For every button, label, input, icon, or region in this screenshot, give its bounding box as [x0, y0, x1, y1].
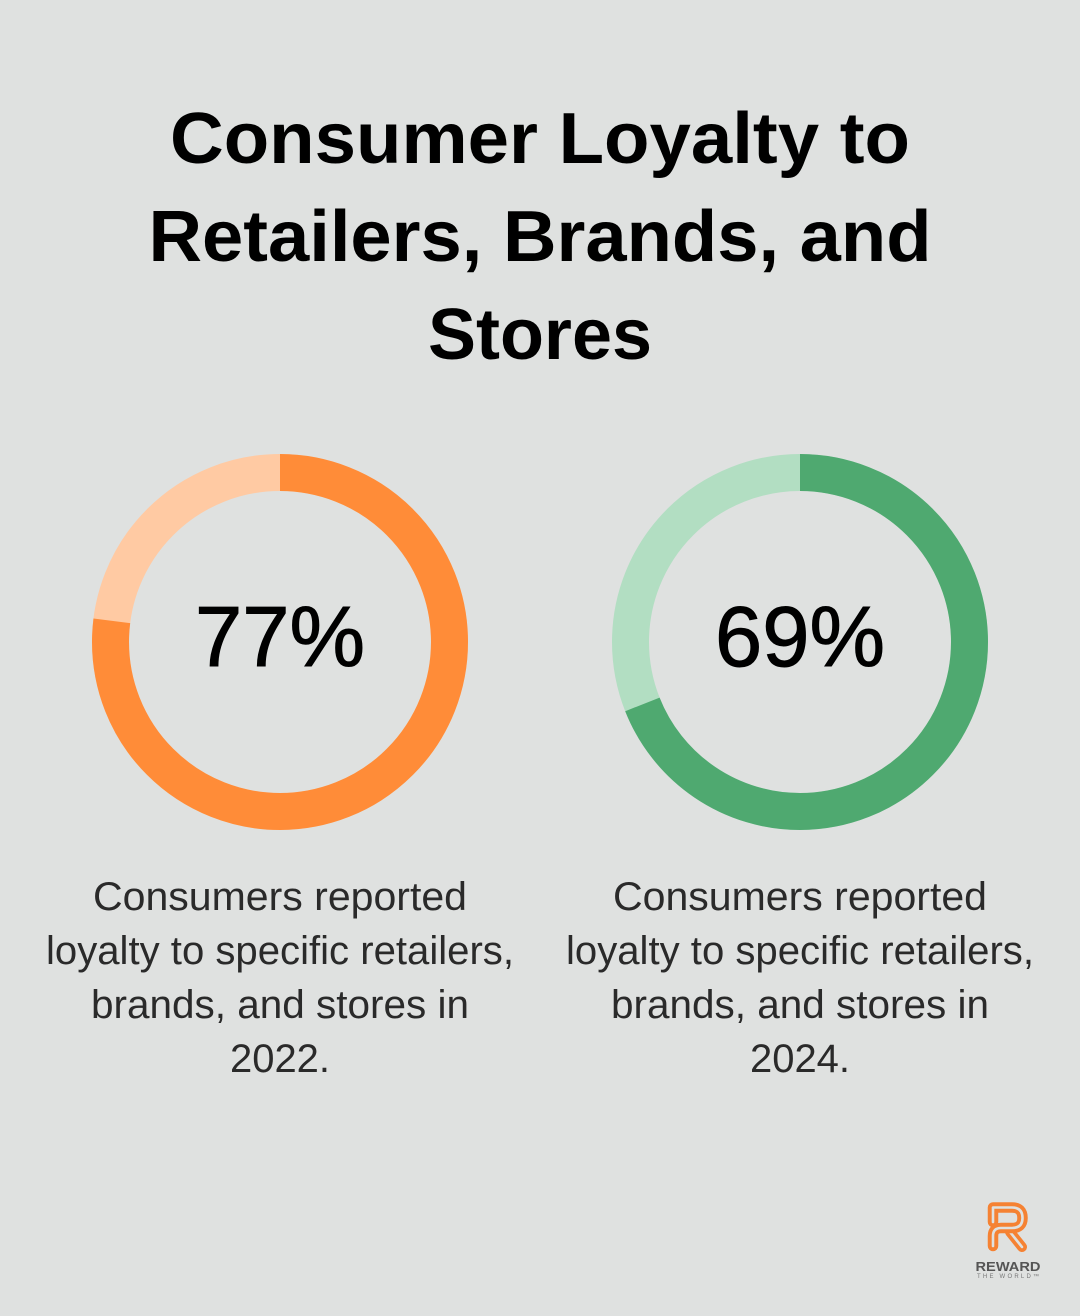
caption: 2022: brands, and stores in	[91, 983, 469, 1027]
title	[148, 99, 932, 375]
title: Consumer Loyalty to	[170, 99, 910, 179]
donut chart: 77%: 77%	[195, 590, 365, 685]
donut chart: 77%	[110, 472, 450, 812]
logo: Reward the World	[976, 1208, 1040, 1280]
icon: stylised R	[993, 1208, 1022, 1247]
title: Retailers, Brands, and	[148, 197, 932, 277]
caption: 2024: brands, and stores in	[611, 983, 989, 1027]
donut chart: 69%: 69%	[715, 590, 885, 685]
caption: 2022	[46, 875, 514, 1081]
caption: 2024: loyalty to specific retailers,	[566, 929, 1034, 973]
caption: 2022: Consumers reported	[93, 875, 467, 919]
donut chart: 69%	[630, 472, 970, 812]
logo: Reward the World: THE WORLD™	[977, 1273, 1039, 1280]
caption: 2022: loyalty to specific retailers,	[46, 929, 514, 973]
caption: 2024: 2024.	[750, 1037, 850, 1081]
caption: 2024: Consumers reported	[613, 875, 987, 919]
title: Stores	[428, 295, 652, 375]
wordmark: REWARD	[976, 1259, 1040, 1274]
caption: 2022: 2022.	[230, 1037, 330, 1081]
caption: 2024	[566, 875, 1034, 1081]
